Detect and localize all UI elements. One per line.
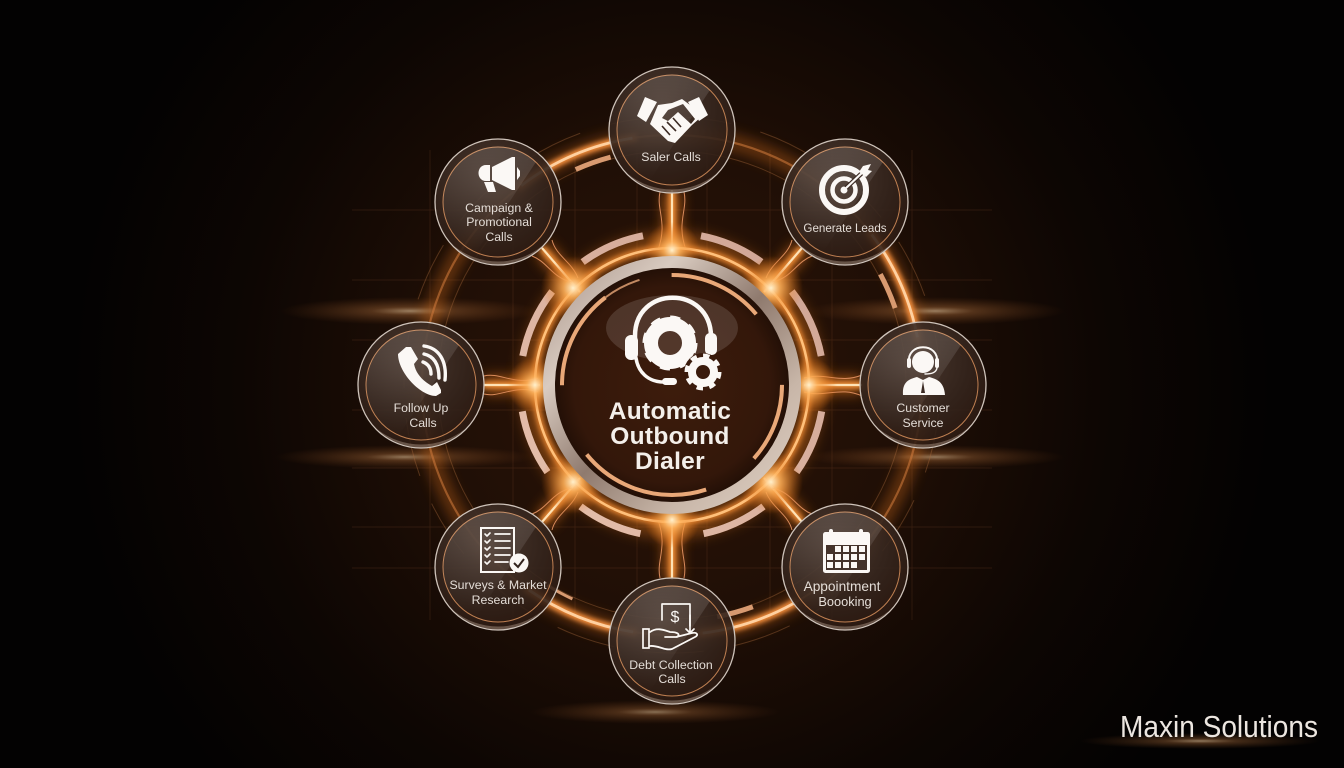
icon: handshake xyxy=(637,97,708,143)
node: Appointment Booking xyxy=(782,504,908,630)
hub title: Outbound xyxy=(610,423,730,450)
label xyxy=(394,401,448,430)
label: Promotional xyxy=(466,215,532,229)
icon: customer agent xyxy=(903,347,945,395)
label: Boooking xyxy=(818,594,872,609)
label: Campaign & xyxy=(465,201,534,215)
icon: target xyxy=(822,164,872,212)
label: Surveys & Market xyxy=(449,578,547,592)
label: Saler Calls xyxy=(641,150,701,164)
icon: headset with gears xyxy=(625,298,722,391)
label: Debt Collection xyxy=(629,658,713,672)
logo: Maxin Solutions: Maxin Solutions xyxy=(1120,709,1318,744)
hub title: Automatic xyxy=(609,398,731,425)
label: Research xyxy=(472,593,524,607)
icon: phone xyxy=(398,346,445,396)
label xyxy=(804,579,881,609)
icon: calendar xyxy=(823,529,870,573)
hub glow ring xyxy=(532,245,812,525)
horizontal light flares xyxy=(275,297,1065,724)
label: Calls xyxy=(658,672,686,686)
hub title: Dialer xyxy=(635,448,705,475)
label: Service xyxy=(902,416,944,430)
node: Surveys & Market Research xyxy=(435,504,561,630)
icon: survey checklist xyxy=(481,528,528,572)
connector beams xyxy=(483,190,862,580)
label: Calls xyxy=(409,416,437,430)
label xyxy=(465,201,534,244)
label xyxy=(629,658,713,686)
central hub xyxy=(507,222,837,548)
hub junction bursts xyxy=(507,222,837,548)
label: Calls xyxy=(485,230,513,244)
label xyxy=(449,578,547,607)
node: Follow Up Calls xyxy=(358,322,484,448)
node: Debt Collection Calls xyxy=(609,578,735,704)
logo: Maxin Solutions xyxy=(1080,709,1320,749)
icon: hand with dollar document: $ xyxy=(671,609,680,626)
hub inner arcs xyxy=(562,275,782,495)
node: Saler Calls xyxy=(609,67,735,193)
hub gloss xyxy=(606,295,738,361)
node: Generate Leads xyxy=(782,139,908,265)
outer orbit ring xyxy=(404,117,940,653)
label: Customer xyxy=(896,401,950,415)
label: Generate Leads xyxy=(803,222,887,235)
node: Customer Service xyxy=(860,322,986,448)
node: Campaign & Promotional Calls xyxy=(435,139,561,265)
background grid xyxy=(352,150,992,620)
hub outer arc segments xyxy=(520,233,824,537)
hub title xyxy=(609,398,731,475)
label: Follow Up xyxy=(394,401,448,415)
label: Appointment xyxy=(804,579,881,594)
hub metallic ring xyxy=(549,262,795,508)
label xyxy=(896,401,950,430)
icon: megaphone xyxy=(478,157,520,192)
